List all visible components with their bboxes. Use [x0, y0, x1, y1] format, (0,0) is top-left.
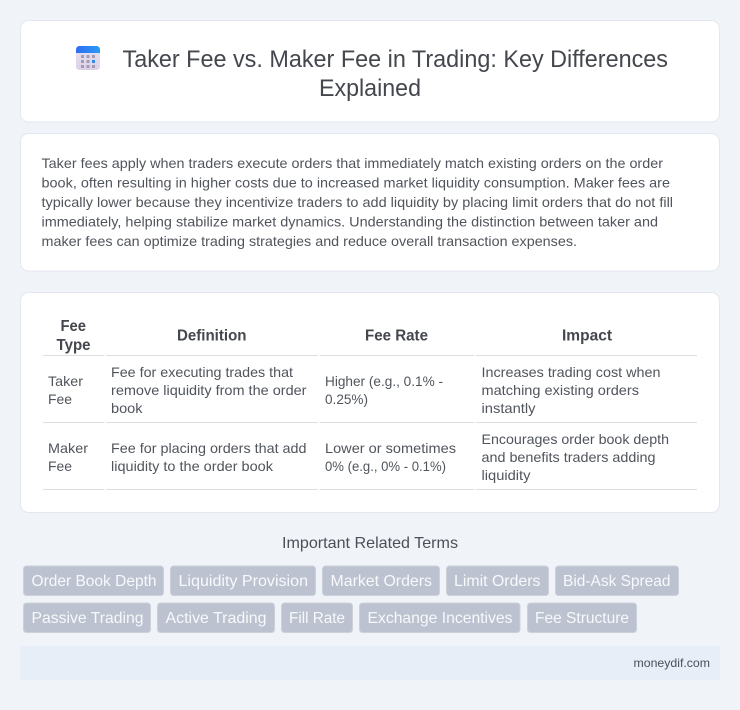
related term tags: Fill Rate — [289, 610, 345, 627]
table row: taker fee: Fee — [48, 391, 72, 407]
table header: Fee Rate — [365, 328, 428, 344]
table header: Type — [56, 337, 91, 354]
summary paragraph — [42, 155, 673, 249]
summary paragraph: book, often resulting in higher costs due to increased market liquidity consumption. Maker fees are — [42, 174, 670, 190]
table row: maker fee: Encourages order book depth — [482, 431, 669, 447]
footer — [20, 646, 720, 680]
related term tags: Bid-Ask Spread — [563, 573, 670, 590]
summary paragraph: Taker fees apply when traders execute orders that immediately match existing orders on the order — [42, 155, 663, 171]
summary paragraph: typically lower because they incentivize traders to add liquidity by placing limit orders that do not fill — [42, 194, 673, 210]
table row: taker fee: instantly — [482, 400, 536, 416]
heading: important related terms: Important Related Terms — [282, 535, 458, 552]
table row: taker fee: Fee for executing trades that — [111, 364, 293, 380]
table row: maker fee: Fee for placing orders that add — [111, 440, 306, 456]
table header — [56, 318, 613, 354]
footer: moneydif.com — [634, 656, 710, 670]
related term tags: Exchange Incentives — [368, 610, 512, 627]
table row: maker fee: Fee — [48, 458, 72, 474]
summary paragraph: maker fees can optimize trading strategies and reduce overall transaction expenses. — [42, 233, 577, 249]
icon: calendar — [76, 46, 100, 70]
title — [122, 46, 668, 102]
table header: Fee — [60, 318, 86, 335]
table row: taker fee: 0.25%) — [325, 391, 368, 407]
title: Explained — [319, 75, 421, 102]
summary paragraph: immediately, helping stabilize market dynamics. Understanding the distinction between taker and — [42, 214, 658, 230]
table row: maker fee: 0% (e.g., 0% - 0.1%) — [325, 458, 446, 474]
table row: maker fee: and benefits traders adding — [482, 449, 656, 465]
table row: taker fee: matching existing orders — [482, 382, 639, 398]
table header: Impact — [562, 328, 613, 344]
table row: maker fee — [48, 431, 669, 483]
related term tags: Active Trading — [166, 610, 266, 627]
related term tags: Passive Trading — [32, 610, 144, 627]
table row: taker fee: Increases trading cost when — [482, 364, 660, 380]
table row: taker fee — [48, 364, 660, 416]
table row: taker fee: book — [111, 400, 144, 416]
related term tags: Liquidity Provision — [178, 573, 308, 590]
table header: Definition — [177, 328, 246, 344]
table row: maker fee: Lower or sometimes — [325, 440, 456, 456]
related term tags — [24, 566, 678, 632]
related term tags: Market Orders — [330, 573, 432, 590]
title: Taker Fee vs. Maker Fee in Trading: Key Differences — [122, 46, 668, 73]
related term tags: Order Book Depth — [32, 573, 156, 590]
panel: summary text — [20, 134, 720, 271]
table row: maker fee: Maker — [48, 440, 88, 456]
related term tags: Limit Orders — [454, 573, 540, 590]
table row: taker fee: remove liquidity from the order — [111, 382, 307, 398]
table row: taker fee: Higher (e.g., 0.1% - — [325, 373, 443, 389]
panel: title card — [20, 20, 720, 122]
panel: comparison table — [20, 292, 720, 512]
table row: maker fee: liquidity — [482, 467, 530, 483]
related term tags: Fee Structure — [535, 610, 629, 627]
table row: maker fee: liquidity to the order book — [111, 458, 274, 474]
table row: taker fee: Taker — [48, 373, 83, 389]
